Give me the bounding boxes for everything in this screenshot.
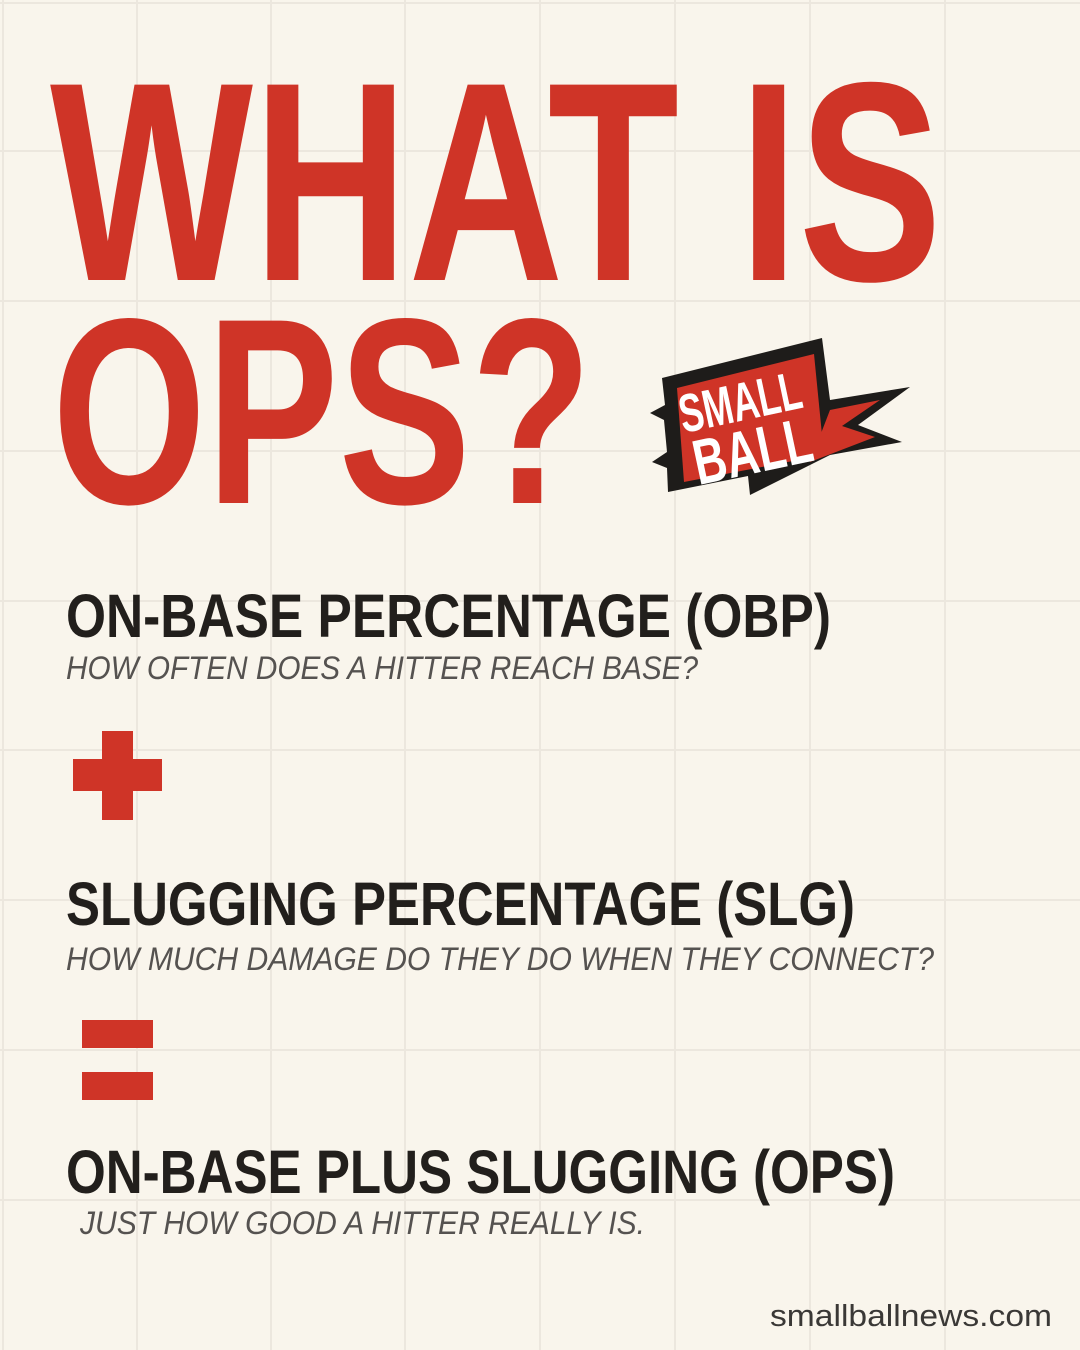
footer url: smallballnews.com bbox=[770, 1298, 1052, 1333]
heading: SLG: SLUGGING PERCENTAGE (SLG) bbox=[66, 870, 855, 938]
logo: small ball pennant: SMALL bbox=[673, 360, 807, 445]
title: OPS? bbox=[52, 264, 592, 560]
logo: small ball pennant: BALL bbox=[686, 403, 819, 499]
subtitle: OPS: JUST HOW GOOD A HITTER REALLY IS. bbox=[79, 1205, 645, 1241]
heading: OBP: ON-BASE PERCENTAGE (OBP) bbox=[66, 582, 831, 650]
title bbox=[50, 24, 942, 560]
icon: plus bbox=[73, 731, 162, 820]
icon: equals bbox=[82, 1020, 153, 1100]
subtitle: SLG: HOW MUCH DAMAGE DO THEY DO WHEN THEY CONNECT? bbox=[66, 941, 934, 977]
logo: small ball pennant bbox=[650, 338, 910, 500]
heading: OPS: ON-BASE PLUS SLUGGING (OPS) bbox=[66, 1138, 895, 1206]
subtitle: OBP: HOW OFTEN DOES A HITTER REACH BASE? bbox=[66, 650, 698, 686]
